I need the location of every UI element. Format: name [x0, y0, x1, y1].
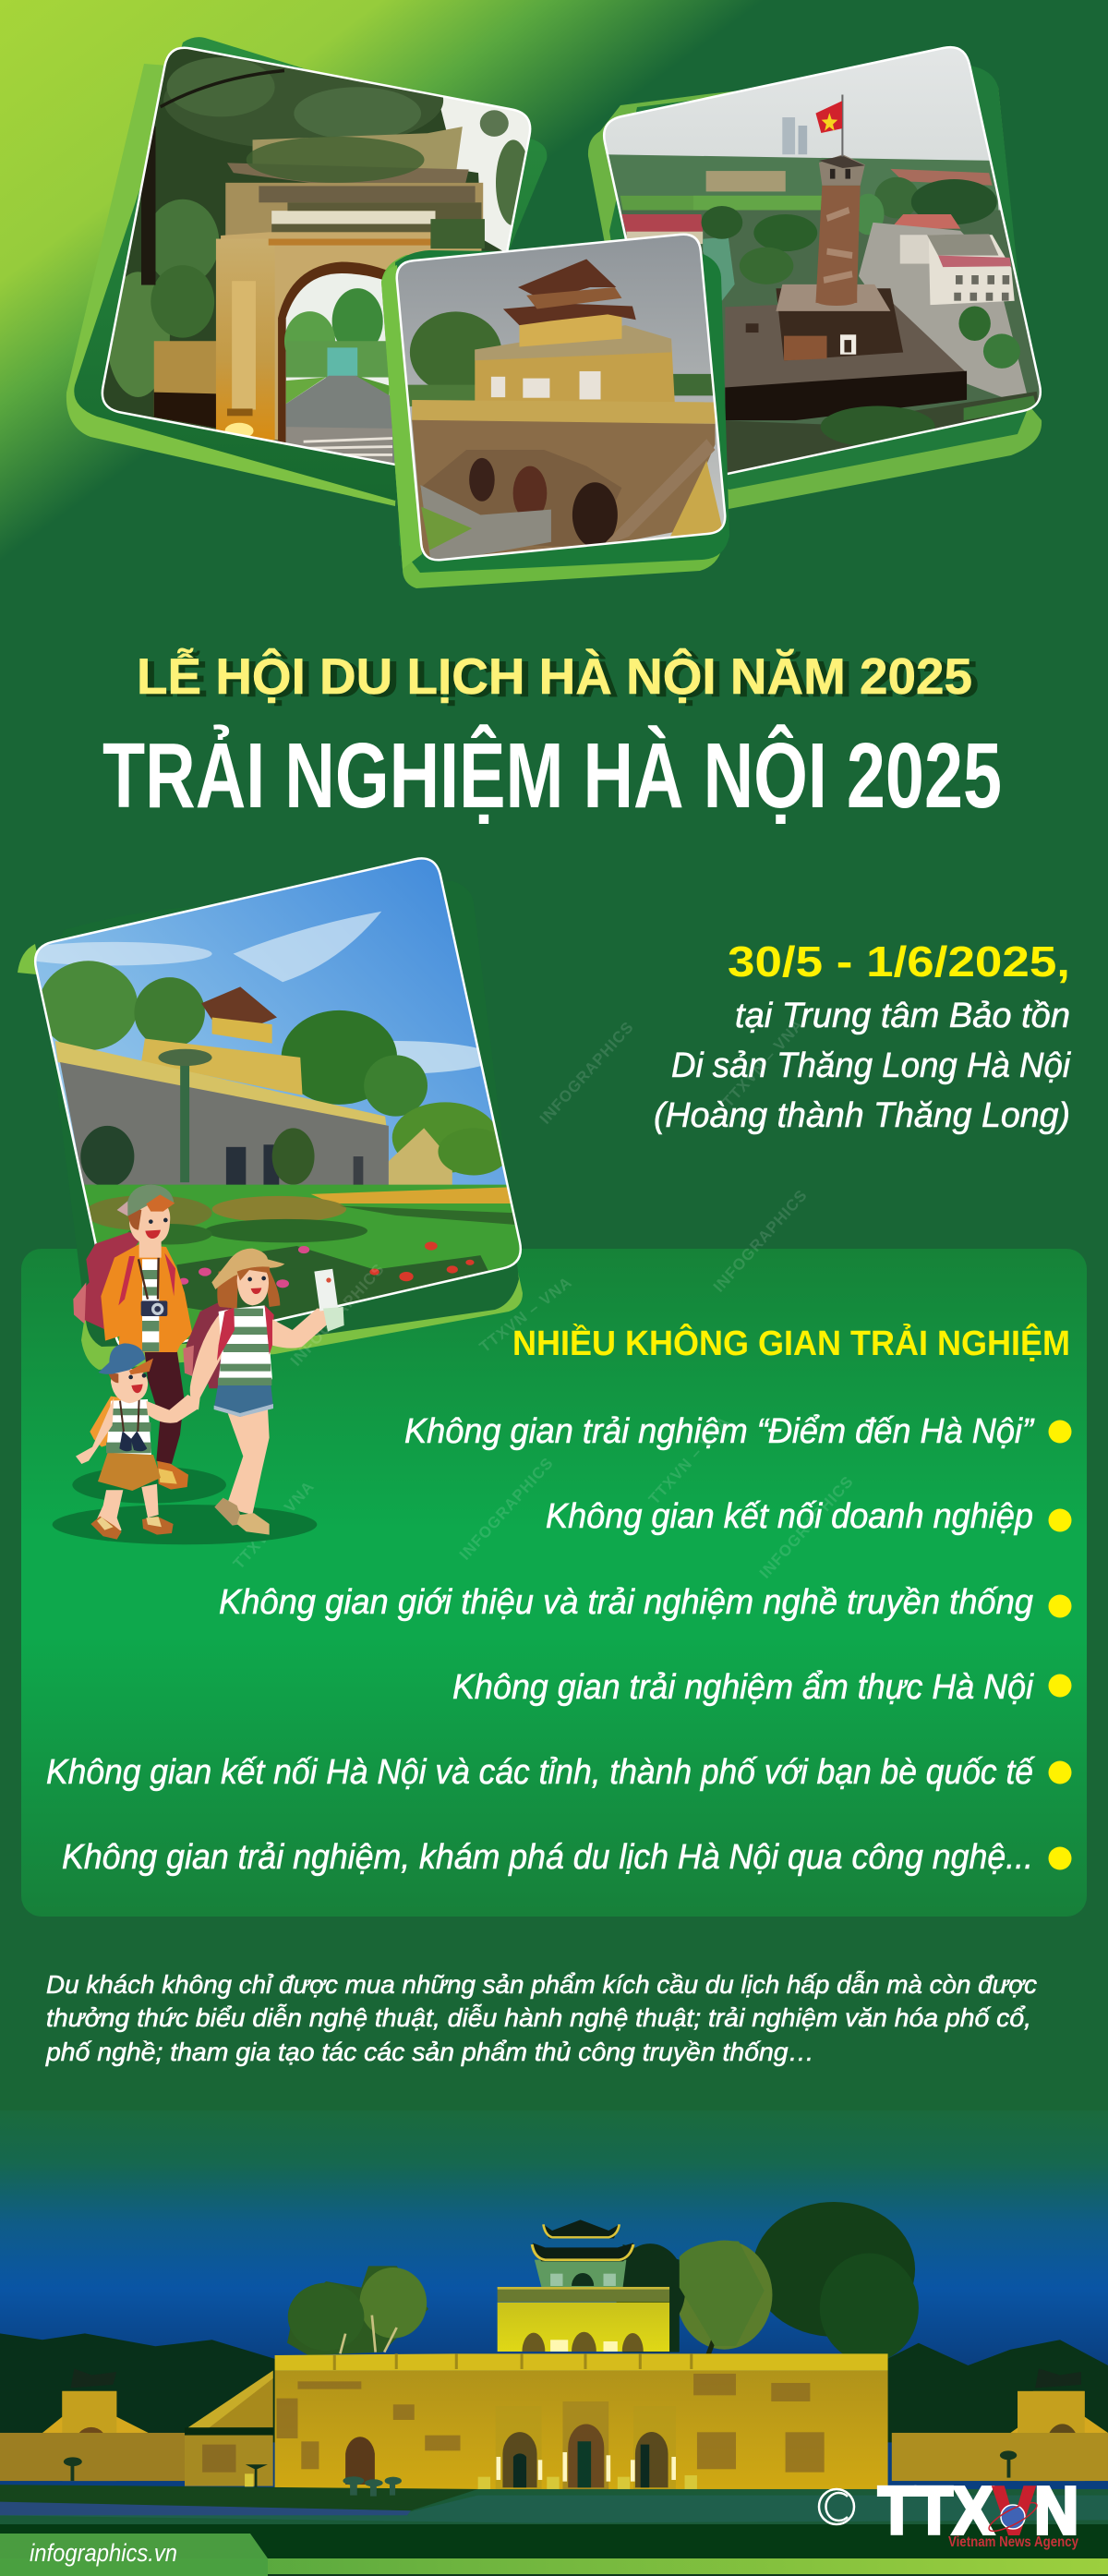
venue line 1: tại Trung tâm Bảo tồn — [735, 997, 1070, 1035]
item 5: Không gian kết nối Hà Nội và các tỉnh, thành phố với bạn bè quốc tế — [46, 1753, 1036, 1792]
bottom photo: Thang Long citadel at night — [0, 2110, 1108, 2576]
watermarks: TTXVN – VNA — [719, 1016, 807, 1111]
photo 1 backing shapes — [66, 37, 547, 506]
copyright icon — [819, 2489, 854, 2524]
panel heading: NHIỀU KHÔNG GIAN TRẢI NGHIỆM — [512, 1322, 1070, 1363]
item 6: Không gian trải nghiệm, khám phá du lịch Hà Nội qua công nghệ... — [62, 1838, 1033, 1877]
watermarks: TTXVN – VNA — [230, 1478, 318, 1573]
logo: TTXVN: TTXVN — [878, 2474, 1078, 2548]
trees and outer wings — [0, 2202, 1108, 2481]
footer strip — [0, 2534, 1108, 2576]
illustration: tourist family — [53, 1185, 344, 1544]
source label: infographics.vn — [30, 2539, 177, 2567]
watermarks — [230, 1016, 857, 1582]
watermarks: INFOGRAPHICS — [756, 1472, 857, 1582]
watermarks: TTXVN – VNA — [476, 1273, 575, 1356]
woman — [183, 1249, 344, 1535]
item 4: Không gian trải nghiệm ẩm thực Hà Nội — [452, 1668, 1034, 1707]
panel: experience spaces — [21, 1249, 1087, 1917]
title line 1: LỄ HỘI DU LỊCH HÀ NỘI NĂM 2025 — [143, 650, 979, 707]
photo 4: citadel garden — [33, 857, 523, 1345]
child — [76, 1343, 199, 1540]
item 3: Không gian giới thiệu và trải nghiệm nghề truyền thống — [219, 1583, 1033, 1622]
date: 30/5 - 1/6/2025, — [728, 937, 1070, 986]
watermarks: TTXVN – VNA — [645, 1413, 733, 1508]
man — [73, 1185, 192, 1490]
photo 2 backing shapes — [381, 250, 729, 588]
photo 3 backing shapes — [588, 66, 1042, 509]
item 1: Không gian trải nghiệm “Điểm đến Hà Nội” — [404, 1412, 1035, 1451]
venue line 3: (Hoàng thành Thăng Long) — [654, 1096, 1070, 1135]
info paragraph: phố nghề; tham gia tạo tác các sản phẩm thủ công truyền thống… — [45, 2038, 814, 2066]
watermarks: INFOGRAPHICS — [287, 1260, 388, 1370]
watermarks: INFOGRAPHICS — [456, 1454, 557, 1564]
photo 1: old gate — [102, 46, 532, 466]
central wall and tower — [0, 2219, 1108, 2526]
space list — [46, 1412, 1071, 1877]
info paragraph: Du khách không chỉ được mua những sản phẩm kích cầu du lịch hấp dẫn mà còn được — [46, 1970, 1037, 1999]
photo 2: palace gate — [395, 233, 726, 562]
info paragraph — [45, 1970, 1037, 2066]
date and venue — [654, 937, 1071, 1135]
photo group: top collage — [55, 28, 1081, 588]
photo 3: flag tower — [602, 46, 1042, 475]
venue line 2: Di sản Thăng Long Hà Nội — [671, 1046, 1071, 1085]
info paragraph: thưởng thức biểu diễn nghệ thuật, diễu hành nghệ thuật; trải nghiệm văn hóa phố cổ, — [46, 2003, 1031, 2032]
title line 1: LỄ HỘI DU LỊCH HÀ NỘI NĂM 2025 — [137, 647, 972, 705]
photo 4 backing shapes — [18, 881, 523, 1370]
ground shadows — [53, 1467, 317, 1544]
logo: TTXVN: Vietnam News Agency — [948, 2534, 1078, 2550]
foreground ground band — [0, 2524, 1108, 2558]
watermarks: INFOGRAPHICS — [536, 1018, 637, 1128]
item 2: Không gian kết nối doanh nghiệp — [546, 1497, 1033, 1536]
watermarks: INFOGRAPHICS — [710, 1186, 811, 1296]
